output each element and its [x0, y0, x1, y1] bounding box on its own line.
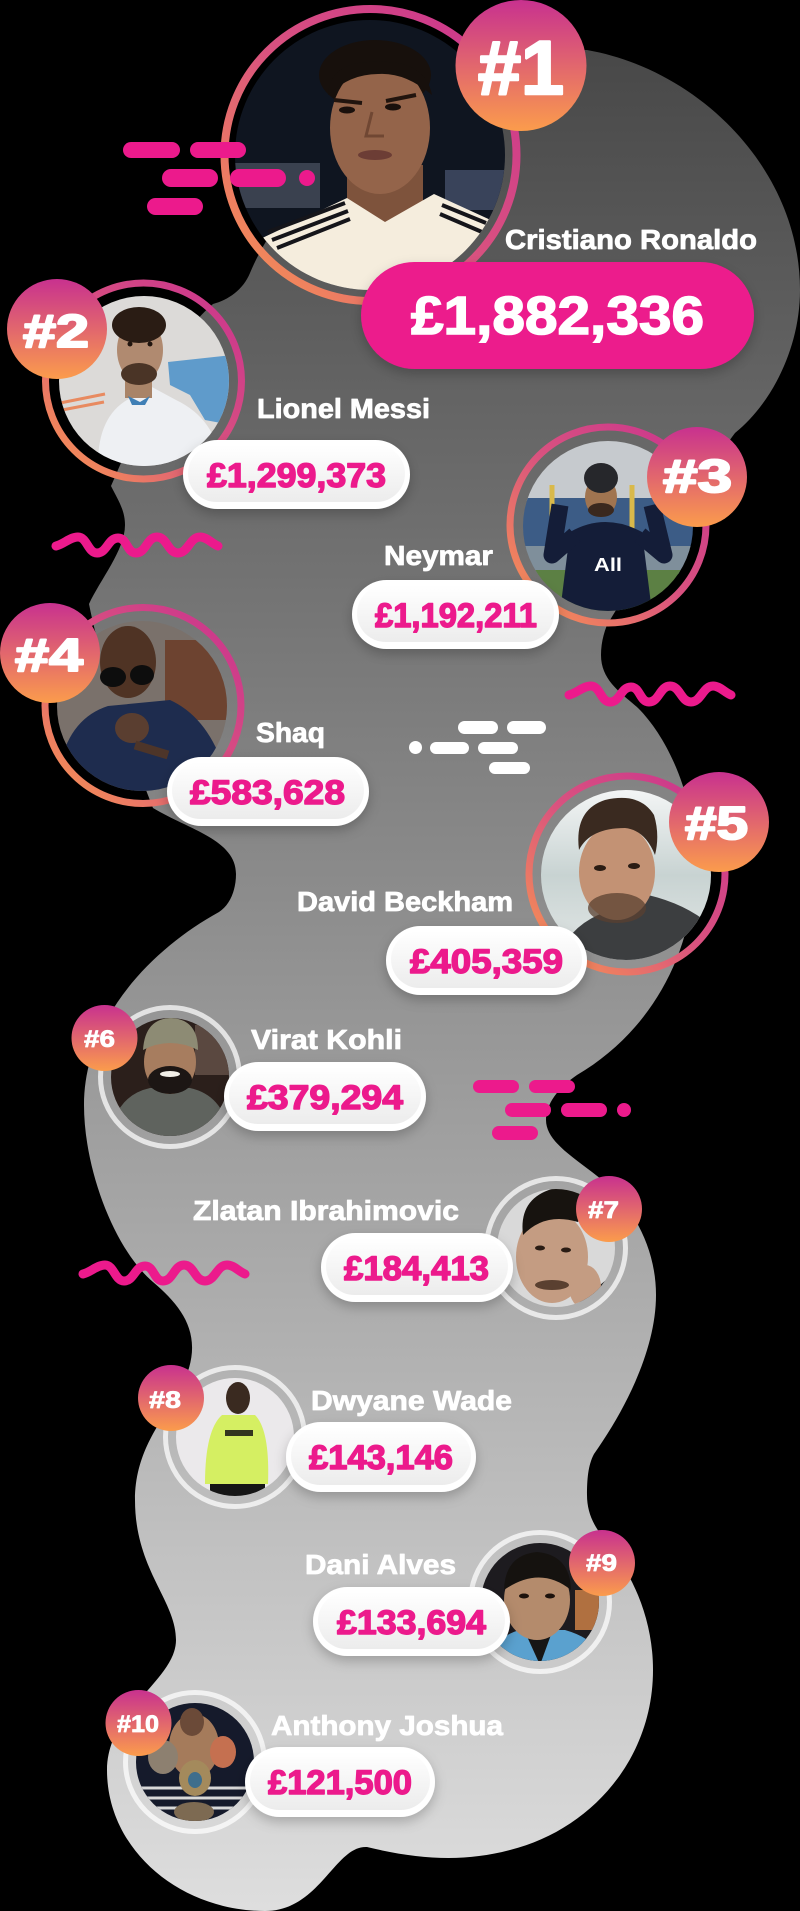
earnings pill [352, 580, 559, 649]
name: Shaq [256, 717, 325, 748]
earnings pill [167, 757, 369, 826]
rank badge #1 [456, 0, 586, 131]
photo: Zlatan Ibrahimovic [497, 1187, 620, 1312]
panel: #6 Virat Kohli [72, 1005, 426, 1146]
earnings pill [386, 926, 587, 995]
earnings pill: £1,299,373 [207, 457, 386, 495]
earnings pill: £1,882,336 [411, 286, 704, 346]
photo: Anthony Joshua [136, 1703, 254, 1822]
panel: #1 Cristiano Ronaldo [224, 0, 757, 369]
panel: #2 Lionel Messi [7, 279, 430, 509]
ring [126, 1692, 264, 1832]
rank badge #5 [669, 772, 769, 872]
earnings pill: £133,694 [337, 1604, 486, 1642]
panel: #9 Dani Alves [305, 1530, 635, 1672]
decoration: white dashes [409, 721, 546, 774]
decoration: pink wave left [56, 537, 218, 553]
name: Dwyane Wade [311, 1385, 512, 1416]
ring [100, 1008, 240, 1146]
ring [45, 608, 241, 804]
earnings pill: £143,146 [309, 1439, 453, 1477]
earnings pill [183, 440, 410, 509]
rank badge #6: #6 [84, 1026, 115, 1053]
rank badge #3: #3 [663, 450, 732, 502]
name: Lionel Messi [257, 393, 430, 424]
decoration: pink dashes middle [473, 1080, 631, 1140]
panel: #3 Neymar [352, 427, 747, 649]
earnings pill: £121,500 [268, 1764, 412, 1802]
photo: Neymar [521, 441, 696, 612]
name: Zlatan Ibrahimovic [193, 1195, 459, 1226]
rank badge #4 [0, 603, 100, 703]
photo: Dani Alves [481, 1543, 604, 1665]
rank badge #9: #9 [586, 1550, 617, 1577]
rank badge #2: #2 [23, 305, 89, 357]
rank badge #8: #8 [149, 1387, 181, 1414]
photo: David Beckham [541, 790, 716, 965]
panel: #10 Anthony Joshua [106, 1690, 503, 1832]
photo: Shaq [56, 621, 232, 800]
rank badge #6 [72, 1005, 138, 1071]
panel: #5 David Beckham [297, 772, 769, 995]
rank badge #8 [138, 1365, 204, 1431]
ring [529, 776, 725, 972]
name: Dani Alves [305, 1549, 456, 1580]
name: Anthony Joshua [271, 1710, 503, 1741]
photo: Lionel Messi [59, 296, 232, 470]
earnings pill: £583,628 [190, 774, 345, 812]
name: Virat Kohli [251, 1024, 402, 1055]
ring [486, 1178, 626, 1318]
rank badge #3 [647, 427, 747, 527]
rank badge #7: #7 [588, 1197, 619, 1224]
decoration: pink wave lower [83, 1265, 245, 1281]
panel: #7 Zlatan Ibrahimovic [193, 1176, 642, 1318]
panel: #8 Dwyane Wade [138, 1365, 512, 1506]
panel: #4 Shaq [0, 603, 369, 826]
earnings pill: £184,413 [344, 1250, 489, 1288]
rank badge #2 [7, 279, 107, 379]
photo: Cristiano Ronaldo [235, 20, 505, 300]
rank badge #10: #10 [117, 1711, 159, 1738]
photo: Virat Kohli [110, 1018, 230, 1140]
name: Cristiano Ronaldo [505, 224, 757, 255]
ring [470, 1532, 610, 1672]
earnings pill: £405,359 [410, 943, 563, 981]
earnings pill [361, 262, 754, 369]
photo: Neymar: All [594, 555, 622, 575]
ring [510, 427, 706, 623]
photo: Dwyane Wade [176, 1378, 294, 1500]
earnings pill: £379,294 [247, 1079, 403, 1117]
decoration: pink dashes top [123, 142, 315, 215]
ring [224, 9, 516, 301]
rank badge #1: #1 [478, 26, 564, 111]
name: Neymar [384, 540, 493, 571]
rank badge #7 [576, 1176, 642, 1242]
earnings pill [224, 1062, 426, 1131]
decoration: pink wave right [569, 686, 731, 702]
ring [46, 283, 242, 479]
rank badge #10 [106, 1690, 172, 1756]
rank badge #9 [569, 1530, 635, 1596]
earnings pill [245, 1747, 435, 1817]
earnings pill [286, 1422, 476, 1492]
earnings pill [313, 1587, 510, 1656]
earnings pill [321, 1233, 513, 1302]
rank badge #5: #5 [685, 797, 748, 849]
name: David Beckham [297, 886, 513, 917]
ring [166, 1368, 304, 1506]
rank badge #4: #4 [15, 629, 84, 681]
earnings pill: £1,192,211 [375, 597, 537, 635]
